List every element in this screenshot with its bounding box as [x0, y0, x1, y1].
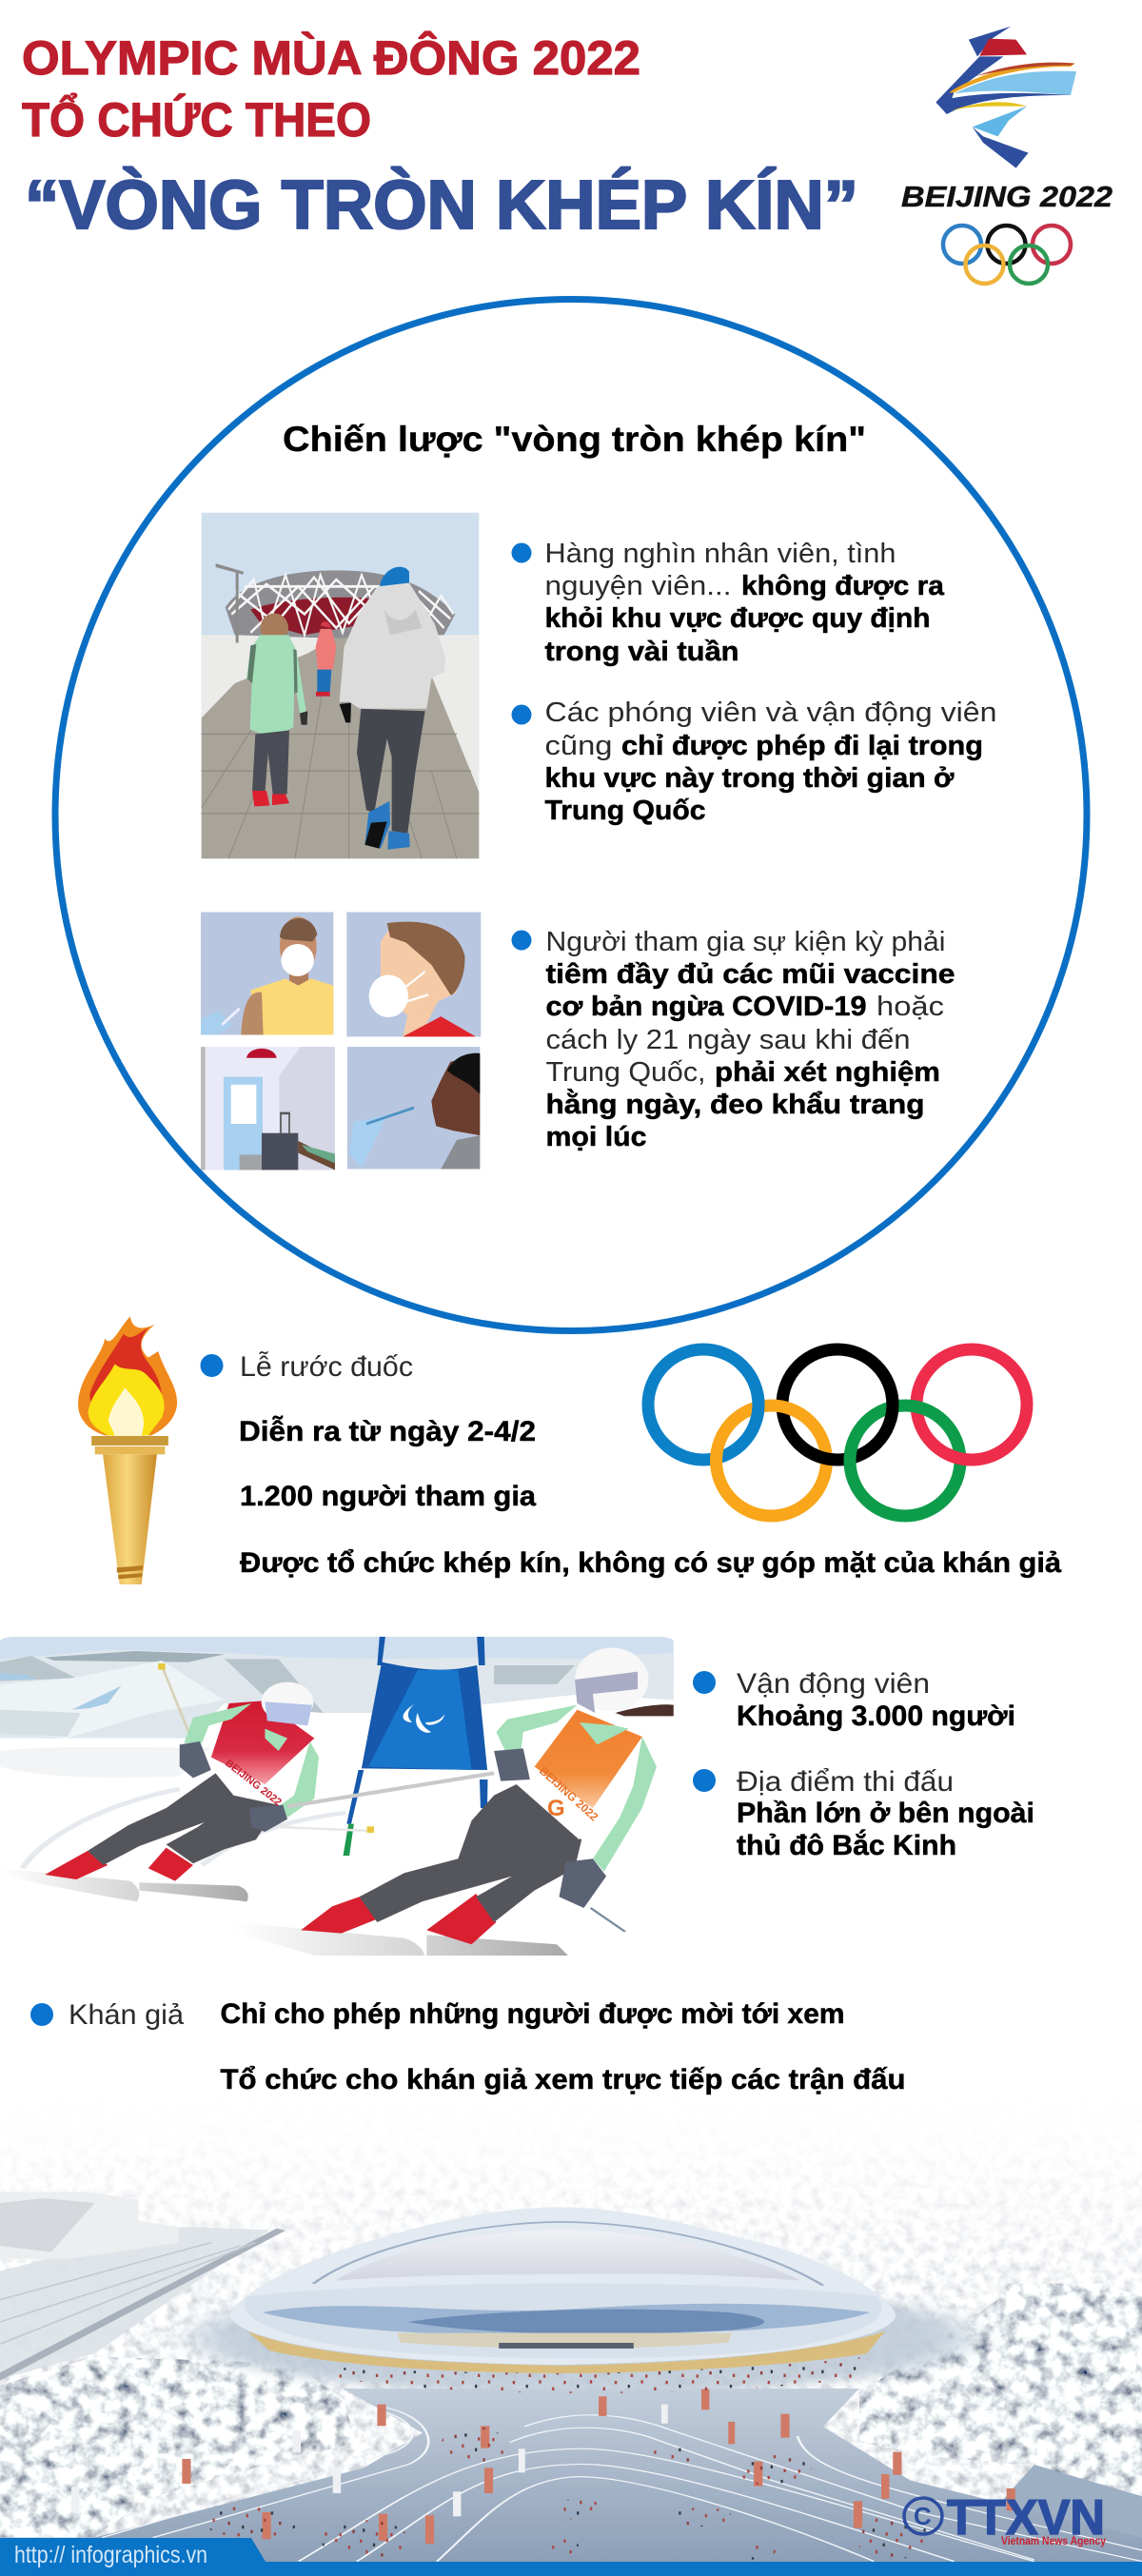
blue ground beneath trees — [0, 2465, 1142, 2563]
bullet — [200, 1354, 223, 1377]
footer bar — [0, 2538, 1142, 2576]
skier left — [0, 1682, 494, 1901]
crowds — [204, 2357, 929, 2560]
skier bib lettering: BEIJING 2022 — [223, 1758, 284, 1808]
text block: athletes and venues: Vận động viên — [737, 1668, 930, 1700]
illustration: winter stadium scene — [0, 2153, 1142, 2562]
bullet — [30, 2003, 53, 2026]
text block: staff and reporters: khỏi khu vực được quy định — [544, 603, 931, 634]
text block: spectators: Khán giả — [69, 1999, 184, 2031]
title — [22, 30, 858, 244]
skier bib lettering: G — [547, 1796, 565, 1821]
source link: http:// infographics.vn — [14, 2542, 207, 2568]
panel: closed-loop strategy circle — [55, 299, 1087, 1330]
text block: participants: cơ bản ngừa COVID-19 — [546, 992, 866, 1022]
masked man panel — [346, 913, 481, 1036]
plaza — [73, 2389, 1142, 2563]
title line 2: TỔ CHỨC THEO — [22, 92, 371, 147]
text block: staff and reporters: nguyện viên... — [544, 571, 731, 601]
logo wordmark: BEIJING 2022 — [901, 180, 1112, 213]
bullet — [512, 542, 531, 563]
text block: participants: Trung Quốc, — [546, 1057, 706, 1088]
text block: torch relay: 1.200 người tham gia — [240, 1481, 536, 1512]
logo: TTXVN: Vietnam News Agency — [1001, 2534, 1106, 2547]
bullet — [512, 931, 531, 950]
text block: torch relay: Được tổ chức khép kín, không có sự góp mặt của khán giả — [240, 1547, 1061, 1579]
icon: Olympic rings — [648, 1349, 1027, 1516]
text block: torch relay: Lễ rước đuốc — [240, 1351, 413, 1383]
vaccination panel — [201, 913, 333, 1034]
text block: participants: Người tham gia sự kiện kỳ phải — [546, 927, 946, 957]
text block: athletes and venues: Phần lớn ở bên ngoài — [737, 1798, 1034, 1829]
stadium — [229, 2207, 896, 2373]
text block: staff and reporters: không được ra — [741, 571, 945, 601]
text block: staff and reporters — [512, 539, 997, 826]
text block: spectators: Chỉ cho phép những người được mời tới xem — [221, 1998, 845, 2030]
illustration: Paralympic skiers — [0, 1637, 674, 1956]
title line 3: “VÒNG TRÒN KHÉP KÍN” — [25, 167, 858, 244]
text block: torch relay: Diễn ra từ ngày 2-4/2 — [239, 1415, 536, 1447]
text block: participants: phải xét nghiệm — [715, 1057, 940, 1088]
text block: participants: hằng ngày, đeo khẩu trang — [546, 1088, 925, 1120]
text block: spectators — [30, 1998, 906, 2095]
text block: staff and reporters: chỉ được phép đi lại trong — [621, 731, 983, 761]
logo: TTXVN: C — [914, 2502, 932, 2530]
skier right — [233, 1648, 674, 1956]
text block: staff and reporters: Các phóng viên và vận động viên — [544, 698, 997, 728]
icon: Olympic torch — [78, 1316, 177, 1584]
text block: staff and reporters: Trung Quốc — [544, 796, 706, 826]
text block: participants: hoặc — [876, 992, 944, 1022]
quarantine room panel — [201, 1047, 335, 1170]
text block: athletes and venues: thủ đô Bắc Kinh — [737, 1829, 956, 1861]
text block: athletes and venues — [693, 1668, 1034, 1861]
text block: athletes and venues: Địa điểm thi đấu — [737, 1766, 954, 1798]
title line 1: OLYMPIC MÙA ĐÔNG 2022 — [22, 30, 640, 85]
icon: Beijing 2022 logo — [901, 27, 1112, 284]
text block: participants: mọi lúc — [546, 1122, 647, 1152]
flags — [182, 2389, 1015, 2544]
lower tree clusters — [0, 2284, 1142, 2563]
slalom gate — [344, 1637, 487, 1856]
text block: spectators: Tổ chức cho khán giả xem trực tiếp các trận đấu — [221, 2064, 906, 2095]
logo Olympic rings — [943, 226, 1071, 284]
mountains — [0, 1649, 674, 1778]
skier bib lettering: BEIJING 2022 — [537, 1764, 601, 1824]
bullet — [512, 704, 531, 725]
text block: participants: cách ly 21 ngày sau khi đến — [546, 1025, 910, 1055]
text block: staff and reporters: Hàng nghìn nhân viên, tình — [544, 539, 896, 569]
text block: staff and reporters: trong vài tuần — [544, 637, 738, 667]
logo: TTXVN: TTXVN — [947, 2490, 1105, 2546]
illustration: people walking to the stadium — [202, 513, 479, 858]
text block: staff and reporters: khu vực này trong thời gian ở — [544, 763, 955, 794]
text block: torch relay — [200, 1351, 1061, 1579]
skier bib lettering — [223, 1758, 601, 1824]
road and building at left — [0, 2192, 286, 2381]
bullet — [693, 1769, 716, 1792]
nasal swab panel — [347, 1047, 480, 1170]
illustration: vaccination, masks, quarantine and testing — [201, 913, 481, 1170]
text block: athletes and venues: Khoảng 3.000 người — [737, 1701, 1015, 1732]
circle heading: Chiến lược "vòng tròn khép kín" — [283, 420, 866, 459]
text block: participants — [512, 927, 955, 1152]
text block: participants: tiêm đầy đủ các mũi vaccine — [546, 959, 955, 990]
bullet — [693, 1671, 716, 1694]
text block: staff and reporters: cũng — [544, 731, 613, 761]
